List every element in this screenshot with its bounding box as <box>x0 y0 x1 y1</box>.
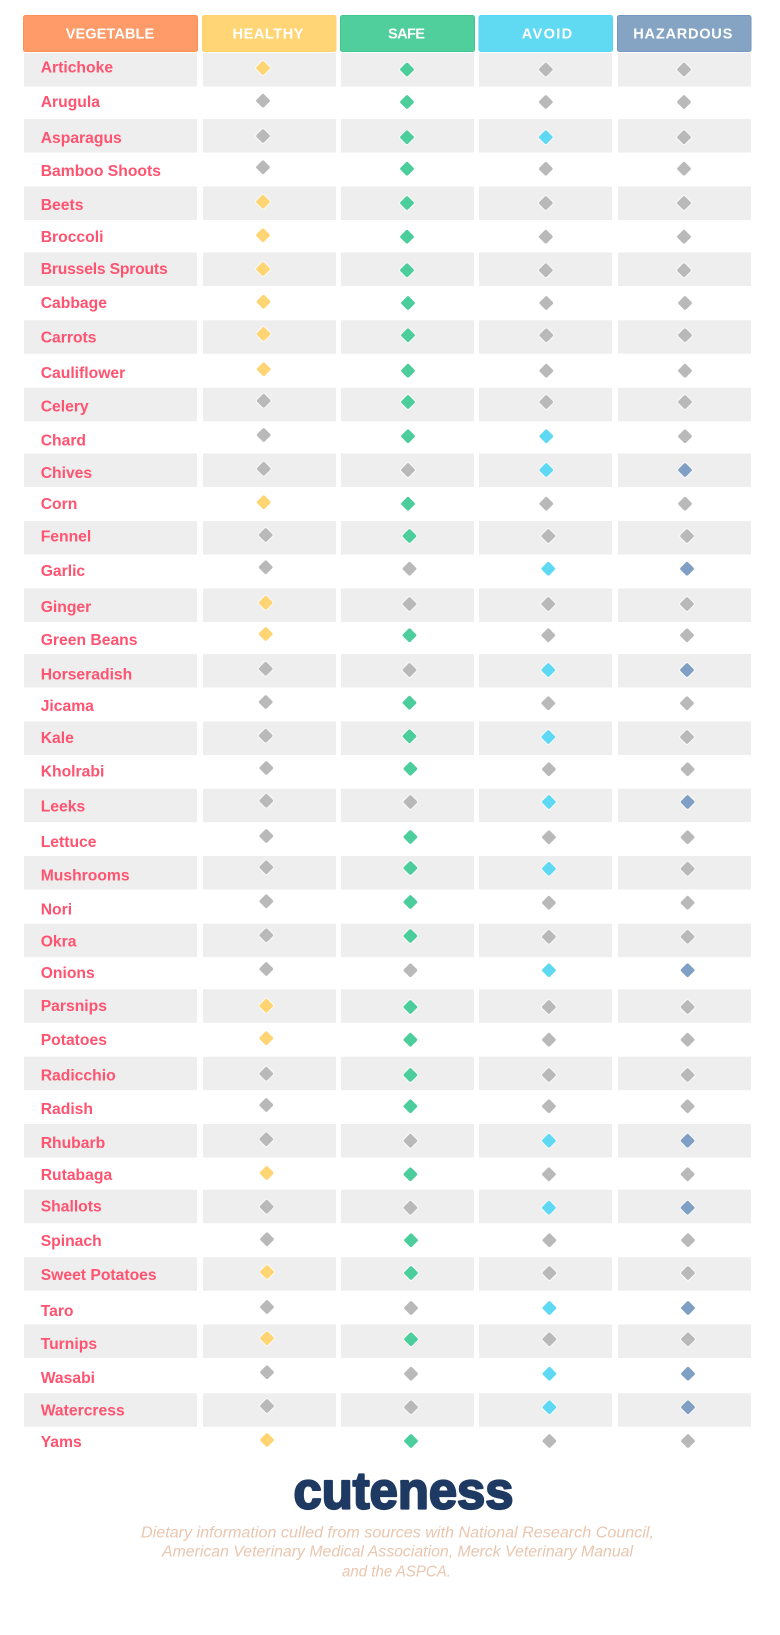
row: Cabbage: Cabbage <box>41 295 107 312</box>
row: Rhubarb <box>41 1132 695 1152</box>
row: Nori <box>41 894 695 918</box>
row: Corn <box>41 495 692 513</box>
row: Mushrooms: Mushrooms <box>41 868 130 884</box>
row: Radish <box>41 1098 695 1118</box>
row: Asparagus <box>41 129 691 147</box>
row: Leeks: Leeks <box>41 798 85 816</box>
header: avoid: AVOID <box>522 26 572 42</box>
row: Lettuce <box>41 829 695 851</box>
row: Arugula: Arugula <box>41 94 100 111</box>
row: Taro: Taro <box>41 1303 74 1320</box>
row: Chard <box>41 428 692 450</box>
row: Leeks <box>41 793 695 816</box>
row: Turnips: Turnips <box>41 1336 97 1353</box>
row: Onions <box>41 962 695 982</box>
row: Rutabaga: Rutabaga <box>41 1167 112 1184</box>
row: Jicama <box>41 695 694 715</box>
row: Watercress: Watercress <box>41 1402 125 1420</box>
row: Parsnips <box>41 998 695 1015</box>
row: Wasabi: Wasabi <box>41 1370 95 1387</box>
row: Yams: Yams <box>41 1434 82 1451</box>
row: Ginger <box>41 595 694 616</box>
row: Cauliflower: Cauliflower <box>41 365 125 382</box>
row: Fennel: Fennel <box>41 528 91 546</box>
row: Kale <box>41 728 694 747</box>
row: Rhubarb: Rhubarb <box>41 1135 105 1152</box>
row: Parsnips: Parsnips <box>41 998 107 1015</box>
row: Garlic <box>41 560 694 580</box>
row: Lettuce: Lettuce <box>41 834 97 851</box>
row: Watercress <box>41 1399 695 1420</box>
header: safe <box>340 16 474 52</box>
grid bands <box>24 53 751 1427</box>
row: Artichoke <box>41 60 691 77</box>
row: Carrots <box>41 327 692 346</box>
row: Shallots <box>41 1198 695 1216</box>
row: Spinach <box>41 1232 695 1250</box>
row: Nori: Nori <box>41 902 72 918</box>
row: Spinach: Spinach <box>41 1233 102 1250</box>
footer source note: and the ASPCA. <box>342 1564 451 1580</box>
row: Broccoli: Broccoli <box>41 229 103 246</box>
row: Jicama: Jicama <box>41 698 94 715</box>
row: Kale: Kale <box>41 730 74 747</box>
row: Chard: Chard <box>41 432 86 450</box>
row: Beets: Beets <box>41 197 84 214</box>
row: Wasabi <box>41 1365 695 1387</box>
row: Garlic: Garlic <box>41 563 85 580</box>
row: Beets <box>41 194 691 214</box>
row: Chives <box>41 461 692 482</box>
row: Arugula <box>41 93 691 111</box>
row: Taro <box>41 1300 695 1320</box>
row: Green Beans: Green Beans <box>41 632 138 649</box>
header: vegetable <box>24 16 198 52</box>
row: Bamboo Shoots: Bamboo Shoots <box>41 163 161 180</box>
row: Celery: Celery <box>41 398 89 416</box>
row: Turnips <box>41 1331 695 1353</box>
row: Broccoli <box>41 228 691 246</box>
row: Shallots: Shallots <box>41 1198 102 1216</box>
table header <box>24 16 751 52</box>
row: Corn: Corn <box>41 496 77 513</box>
row: Brussels Sprouts <box>41 261 691 278</box>
row: Potatoes: Potatoes <box>41 1032 107 1049</box>
row: Kholrabi <box>41 761 695 780</box>
row: Sweet Potatoes <box>41 1265 695 1284</box>
row: Onions: Onions <box>41 965 95 982</box>
row: Horseradish: Horseradish <box>41 666 132 684</box>
row: Horseradish <box>41 661 694 684</box>
row: Cabbage <box>41 294 692 312</box>
row: Okra: Okra <box>41 934 77 950</box>
footer source note: Dietary information culled from sources with National Research Council, <box>141 1524 654 1542</box>
row: Fennel <box>41 528 694 546</box>
row: Mushrooms <box>41 860 695 884</box>
row: Okra <box>41 928 695 950</box>
row: Radicchio <box>41 1066 695 1084</box>
row: Ginger: Ginger <box>41 599 91 616</box>
row: Green Beans <box>41 627 694 649</box>
header: healthy: HEALTHY <box>232 26 304 42</box>
row: Radicchio: Radicchio <box>41 1068 116 1084</box>
row: Asparagus: Asparagus <box>41 130 122 147</box>
header: vegetable: VEGETABLE <box>66 26 154 42</box>
header: healthy <box>202 16 336 52</box>
header: avoid <box>479 16 612 52</box>
row: Brussels Sprouts: Brussels Sprouts <box>41 261 168 278</box>
row: Carrots: Carrots <box>41 330 97 346</box>
row: Yams <box>41 1433 695 1451</box>
footer source note <box>141 1524 654 1580</box>
header: safe: SAFE <box>388 26 425 42</box>
footer source note: American Veterinary Medical Association, Merck Veterinary Manual <box>161 1544 634 1560</box>
row: Radish: Radish <box>41 1101 93 1118</box>
row: Rutabaga <box>41 1166 695 1184</box>
header: hazardous: HAZARDOUS <box>633 26 733 42</box>
logo: cuteness: cuteness <box>294 1462 514 1520</box>
row: Chives: Chives <box>41 465 92 482</box>
row: Potatoes <box>41 1031 695 1049</box>
row: Bamboo Shoots <box>41 160 691 180</box>
row: Kholrabi: Kholrabi <box>41 764 104 780</box>
row: Sweet Potatoes: Sweet Potatoes <box>41 1267 157 1284</box>
row: Cauliflower <box>41 362 692 382</box>
row: Celery <box>41 393 692 416</box>
row: Artichoke: Artichoke <box>41 60 113 76</box>
header: hazardous <box>618 16 751 52</box>
